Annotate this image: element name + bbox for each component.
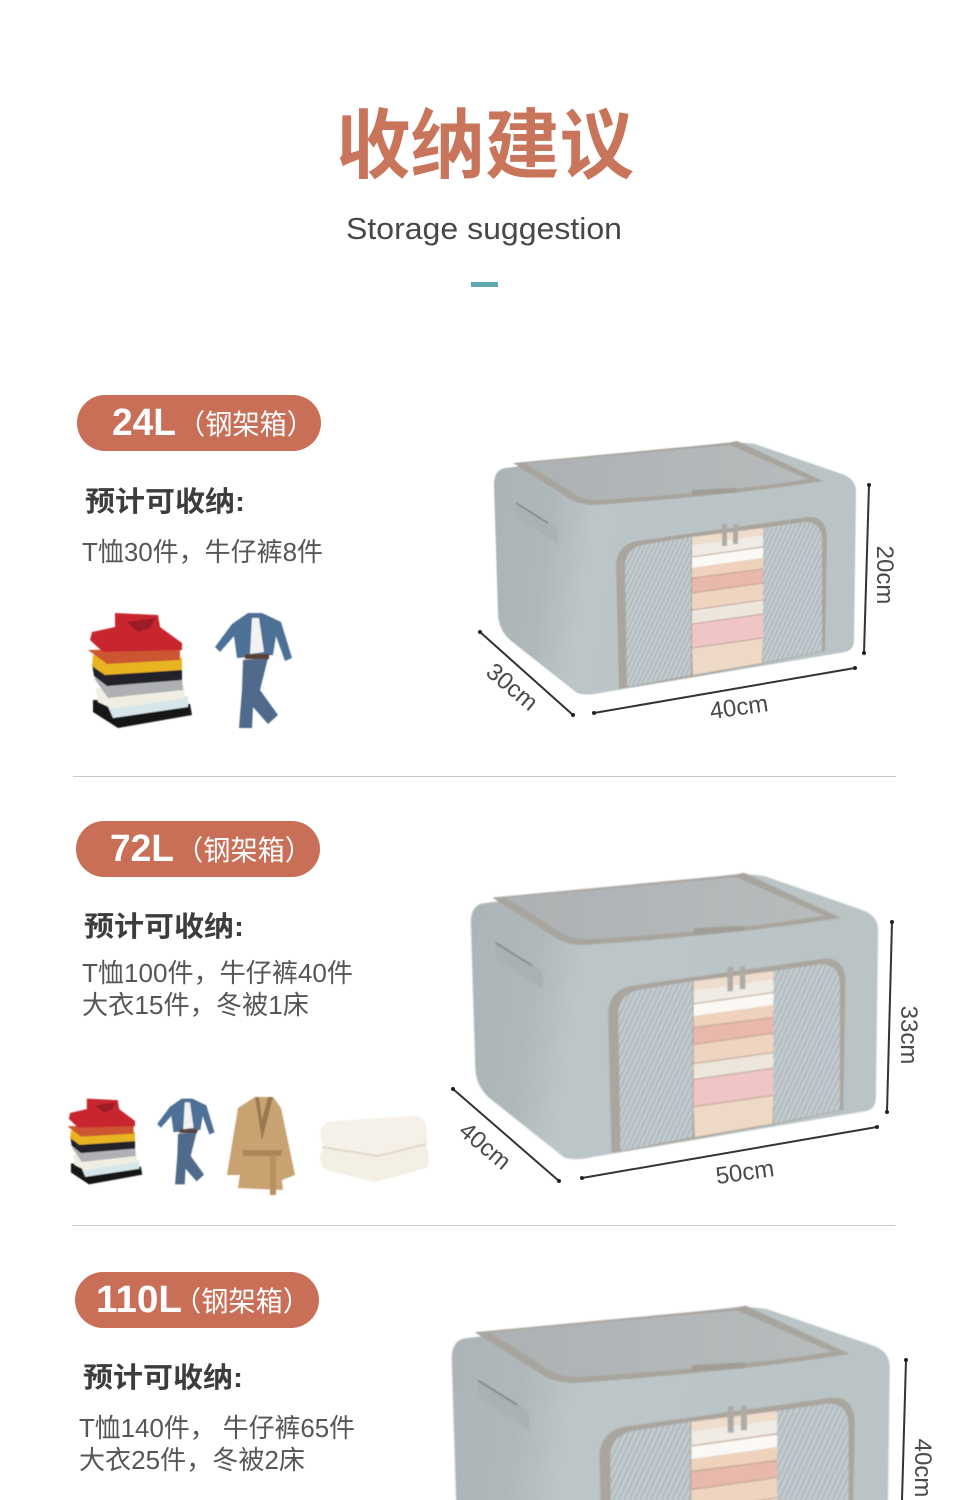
storage heading: 预计可收纳: [83, 1362, 243, 1393]
capacity pill: 110L [96, 1279, 182, 1321]
dimension: depth 40cm [451, 1087, 561, 1183]
dimension: height 40cm: 40cm [909, 1439, 936, 1497]
icon: camel coat [227, 1097, 295, 1195]
icon: folded clothes stack [88, 613, 192, 728]
icon: folded quilt [320, 1116, 429, 1182]
capacity text: 大衣25件，冬被2床 [79, 1445, 305, 1475]
storage box illustration [494, 441, 856, 694]
storage box illustration [452, 1306, 890, 1500]
dimension: height 33cm: 33cm [895, 1006, 922, 1064]
dimension: width 50cm [580, 1125, 879, 1190]
storage box illustration [471, 873, 878, 1159]
panel: 110L [75, 1272, 936, 1500]
panel: 24L [77, 395, 898, 728]
capacity text: T恤100件，牛仔裤40件 [82, 958, 353, 988]
icon: denim outfit [215, 613, 292, 728]
dimension: height 20cm: 20cm [871, 546, 898, 604]
capacity text [79, 1413, 355, 1475]
capacity pill: （钢架箱） [174, 1286, 310, 1317]
capacity pill [77, 395, 321, 451]
dimension: width 40cm: 40cm [708, 690, 770, 725]
dimension: depth 40cm: 40cm [454, 1117, 516, 1175]
capacity text: 大衣15件，冬被1床 [82, 990, 309, 1020]
title: 收纳建议 [336, 104, 634, 189]
capacity pill: （钢架箱） [176, 835, 312, 866]
capacity pill [76, 821, 320, 877]
capacity text: T恤30件，牛仔裤8件 [82, 537, 323, 567]
storage heading: 预计可收纳: [84, 911, 244, 942]
capacity text [82, 958, 353, 1020]
storage heading: 预计可收纳: [85, 486, 245, 517]
dimension: width 40cm [592, 666, 857, 725]
capacity pill: 72L [110, 828, 174, 870]
dimension: width 50cm: 50cm [714, 1155, 776, 1190]
teal accent bar [471, 282, 498, 287]
dimension: height 40cm [902, 1358, 936, 1500]
capacity pill [75, 1272, 319, 1328]
panel: 72L [67, 821, 922, 1195]
subtitle: Storage suggestion [346, 211, 622, 246]
icon: denim outfit [157, 1099, 215, 1184]
capacity text: T恤140件， 牛仔裤65件 [79, 1413, 355, 1443]
capacity pill: 24L [112, 402, 176, 444]
dimension: depth 30cm: 30cm [481, 658, 543, 716]
capacity pill: （钢架箱） [178, 409, 314, 440]
dimension: height 20cm [862, 483, 898, 655]
icon: folded clothes stack [67, 1099, 142, 1184]
dimension: depth 30cm [478, 630, 575, 717]
dimension: height 33cm [885, 920, 922, 1114]
